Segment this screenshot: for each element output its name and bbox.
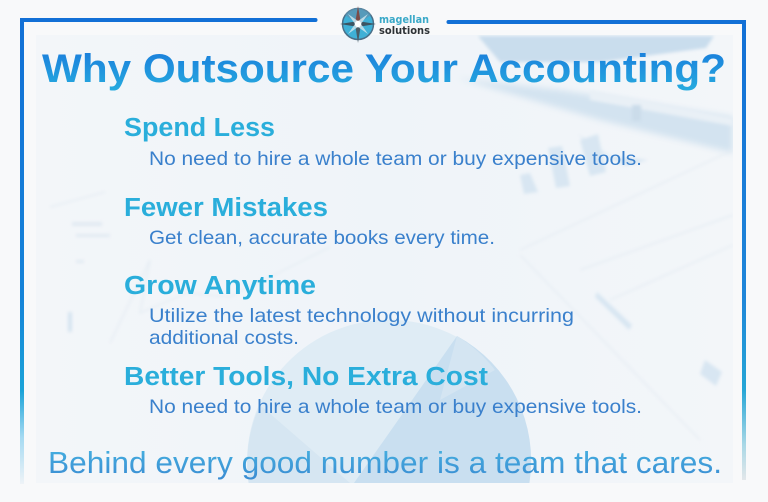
body: Spend Less: No need to hire a whole team or buy expensive tools. — [149, 148, 642, 170]
heading: Spend Less: Spend Less — [124, 114, 275, 142]
tagline: Behind every good number is a team that cares. — [48, 445, 722, 480]
body: Fewer Mistakes: Get clean, accurate books every time. — [149, 227, 495, 249]
body: Better Tools: No need to hire a whole team or buy expensive tools. — [149, 396, 642, 418]
body line 1: Grow Anytime: Utilize the latest technology without incurring — [149, 305, 574, 327]
item: Fewer Mistakes — [124, 194, 495, 249]
heading: Better Tools: Better Tools, No Extra Cost — [124, 363, 489, 391]
item: Better Tools, No Extra Cost — [124, 363, 642, 418]
logo wordmark bottom: solutions — [379, 25, 430, 37]
body line 2: Grow Anytime: additional costs. — [149, 327, 299, 349]
icon: compass — [340, 6, 376, 43]
heading: Fewer Mistakes: Fewer Mistakes — [124, 194, 328, 222]
logo wordmark top: magellan — [379, 14, 429, 26]
heading: Grow Anytime: Grow Anytime — [124, 272, 316, 300]
title: Why Outsource Your Accounting? — [42, 47, 726, 91]
logo: Magellan Solutions — [340, 6, 430, 43]
item: Spend Less — [124, 114, 642, 170]
item: Grow Anytime — [124, 272, 574, 349]
pie chart in background — [247, 320, 531, 483]
